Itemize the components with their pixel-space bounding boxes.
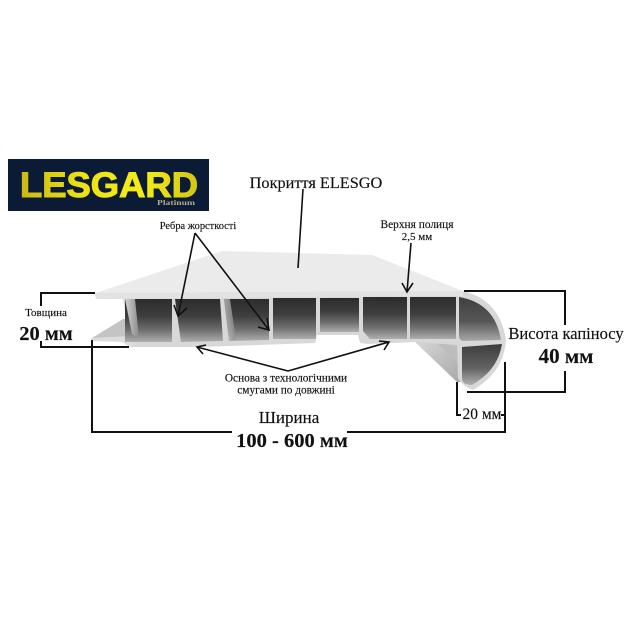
dimension: thickness 20 mm: 20 мм bbox=[19, 323, 73, 345]
dimension: drip 20 mm: 20 мм bbox=[462, 406, 502, 423]
logo: LESGARD Platinum: LESGARD bbox=[20, 166, 198, 205]
dimension: thickness 20 mm bbox=[19, 293, 129, 347]
profile cross-section bbox=[91, 251, 506, 390]
profile body bbox=[95, 291, 506, 390]
label: base with technological strips and arrows bbox=[197, 341, 389, 396]
lower left flange bbox=[92, 319, 130, 338]
dimension: nosing height 40 mm: 40 мм bbox=[539, 344, 593, 368]
label: stiffening ribs with arrows: Ребра жорсткості bbox=[160, 221, 236, 232]
dimension: width 100-600 mm: 100 - 600 мм bbox=[236, 430, 348, 452]
dimension: nosing height 40 mm: Висота капіносу bbox=[508, 324, 624, 343]
label: base with technological strips and arrows: Основа з технологічними bbox=[225, 372, 347, 384]
logo: LESGARD Platinum: Platinum bbox=[157, 198, 196, 207]
logo: LESGARD Platinum bbox=[8, 159, 209, 211]
label: stiffening ribs with arrows bbox=[160, 221, 269, 330]
dimension: nosing height 40 mm bbox=[464, 291, 624, 392]
label: top shelf 2.5 mm with arrow: Верхня полиця bbox=[381, 219, 454, 231]
chambers of the base bbox=[125, 297, 456, 342]
top surface: ELESGO coating bbox=[95, 251, 463, 293]
label: ELESGO coating bbox=[250, 173, 383, 268]
dimension: width 100-600 mm bbox=[92, 340, 505, 452]
nosing lower chamber bbox=[462, 344, 502, 385]
dimension: drip 20 mm bbox=[457, 382, 505, 423]
dimension: thickness 20 mm: Товщина bbox=[25, 307, 67, 319]
label: top shelf 2.5 mm with arrow bbox=[381, 219, 454, 292]
nosing upper chamber bbox=[459, 297, 501, 341]
label: base with technological strips and arrows: смугами по довжині bbox=[237, 384, 335, 396]
front lip highlight bbox=[95, 291, 463, 299]
label: ELESGO coating: Покриття ELESGO bbox=[250, 173, 383, 192]
drip strip under nosing bbox=[413, 340, 462, 382]
dimension: width 100-600 mm: Ширина bbox=[259, 408, 320, 427]
label: top shelf 2.5 mm with arrow: 2,5 мм bbox=[402, 231, 432, 243]
